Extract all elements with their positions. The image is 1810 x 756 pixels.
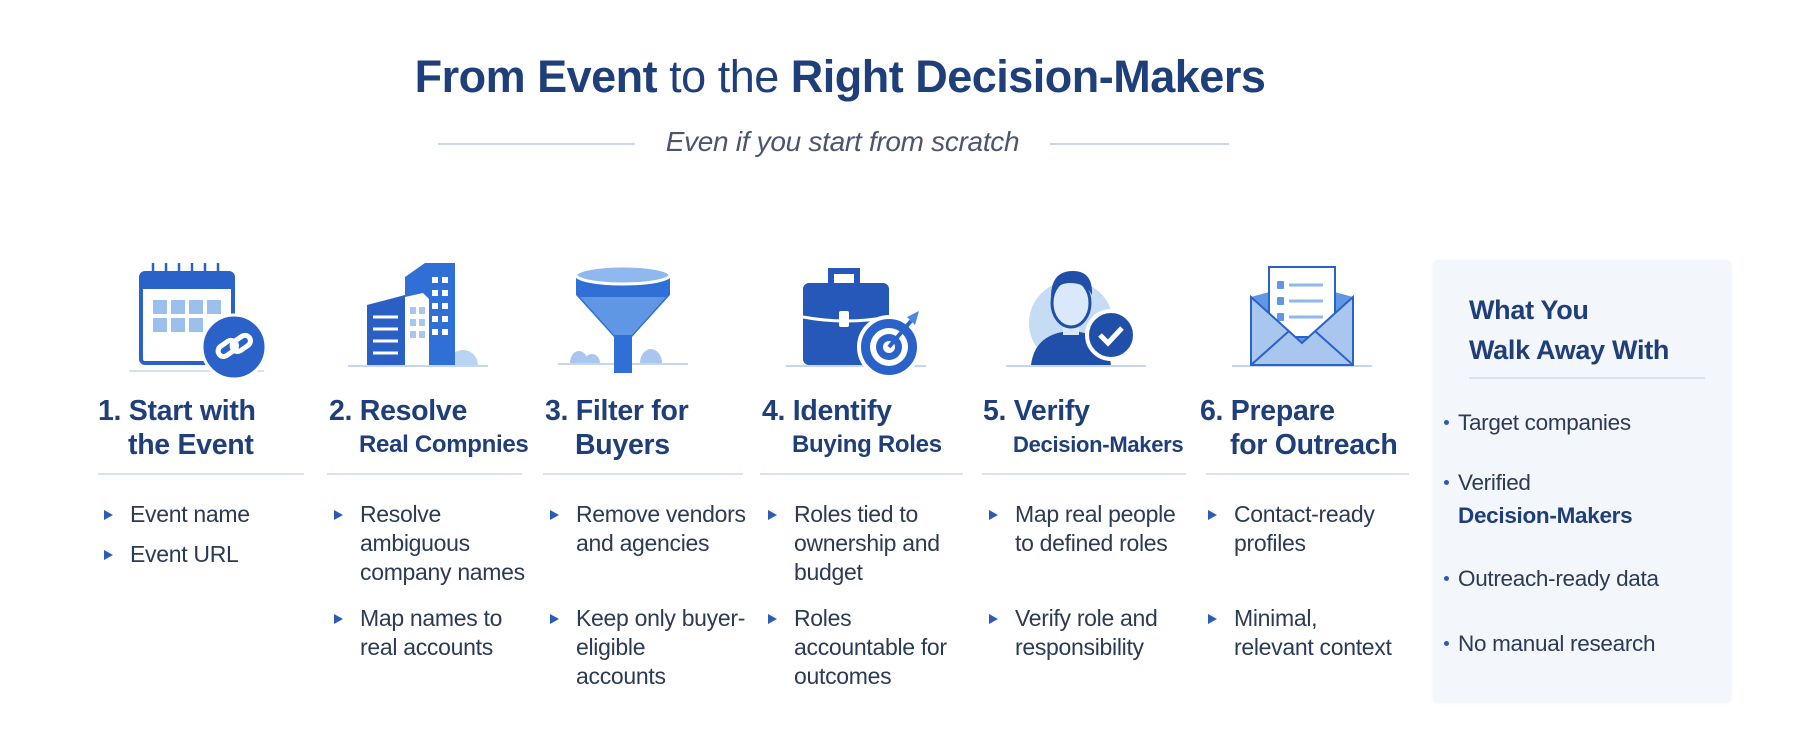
bullets col 4: Roles tied to [794,501,918,527]
panel heading [1469,295,1669,365]
heading 2: 2. Resolve [329,395,467,427]
heading 4 [762,395,942,458]
icon: calendar with link [129,263,264,378]
heading 5 [983,395,1183,457]
heading 5: 5. Verify [983,395,1090,427]
heading 3 [545,395,688,461]
subtitle: Even if you start from scratch [666,126,1019,157]
text: accountable for [794,634,947,660]
bullets col 2: ambiguous [360,530,470,556]
heading 4: 4. Identify [762,395,892,427]
bullets col 3: Remove vendors [576,501,746,527]
panel items: Target companies [1458,410,1631,435]
bullets col 6: profiles [1234,530,1306,556]
bullets col 3: and agencies [576,530,709,556]
bullets col 6: Contact-ready [1234,501,1375,527]
icon: funnel [558,268,688,373]
panel heading: What You [1469,295,1589,325]
heading 3: Buyers [575,429,670,461]
text: eligible [576,634,645,660]
text: Map names to [360,605,502,631]
heading 6 [1200,395,1397,461]
bullets col 2 [330,500,525,587]
heading 6: for Outreach [1230,429,1397,461]
heading 2: Real Compnies [359,431,528,458]
icon: envelope with list [1232,266,1372,367]
icon: buildings [348,263,488,367]
heading 6: 6. Prepare [1200,395,1335,427]
text: Minimal, [1234,605,1317,631]
text: outcomes [794,663,891,689]
bullets col 2: company names [360,559,525,585]
heading 1: 1. Start with [98,395,256,427]
bullets col 4 [764,500,940,587]
heading 2 [329,395,528,458]
text: relevant context [1234,634,1392,660]
bullets col 4: budget [794,559,863,585]
bullets col 5: to defined roles [1015,530,1167,556]
bullets col 5: Map real people [1015,501,1175,527]
text: Verify role and [1015,605,1158,631]
icon: person verified [1006,271,1146,367]
text: real accounts [360,634,493,660]
text: Roles [794,605,851,631]
panel: what you walk away with [1433,260,1731,702]
text: Decision-Makers [1458,503,1632,528]
panel heading: Walk Away With [1469,335,1669,365]
bullets col 1: Event name [130,501,250,527]
title: From Event to the Right Decision-Makers [415,51,1265,102]
text: Outreach-ready data [1458,566,1659,591]
heading 3: 3. Filter for [545,395,688,427]
text: Verified [1458,470,1531,495]
icon: briefcase with target [786,268,926,375]
text: accounts [576,663,666,689]
text: No manual research [1458,631,1655,656]
bullets col 4: ownership and [794,530,940,556]
heading 1 [98,395,256,461]
heading 1: the Event [128,429,254,461]
bullets col 5 [985,500,1175,558]
heading 4: Buying Roles [792,431,942,458]
bullets col 6 [1204,500,1375,558]
text: Keep only buyer- [576,605,745,631]
text: responsibility [1015,634,1144,660]
bullets col 2: Resolve [360,501,441,527]
bullets col 3 [546,500,746,558]
heading 5: Decision-Makers [1013,432,1183,457]
text: Event URL [130,541,239,567]
